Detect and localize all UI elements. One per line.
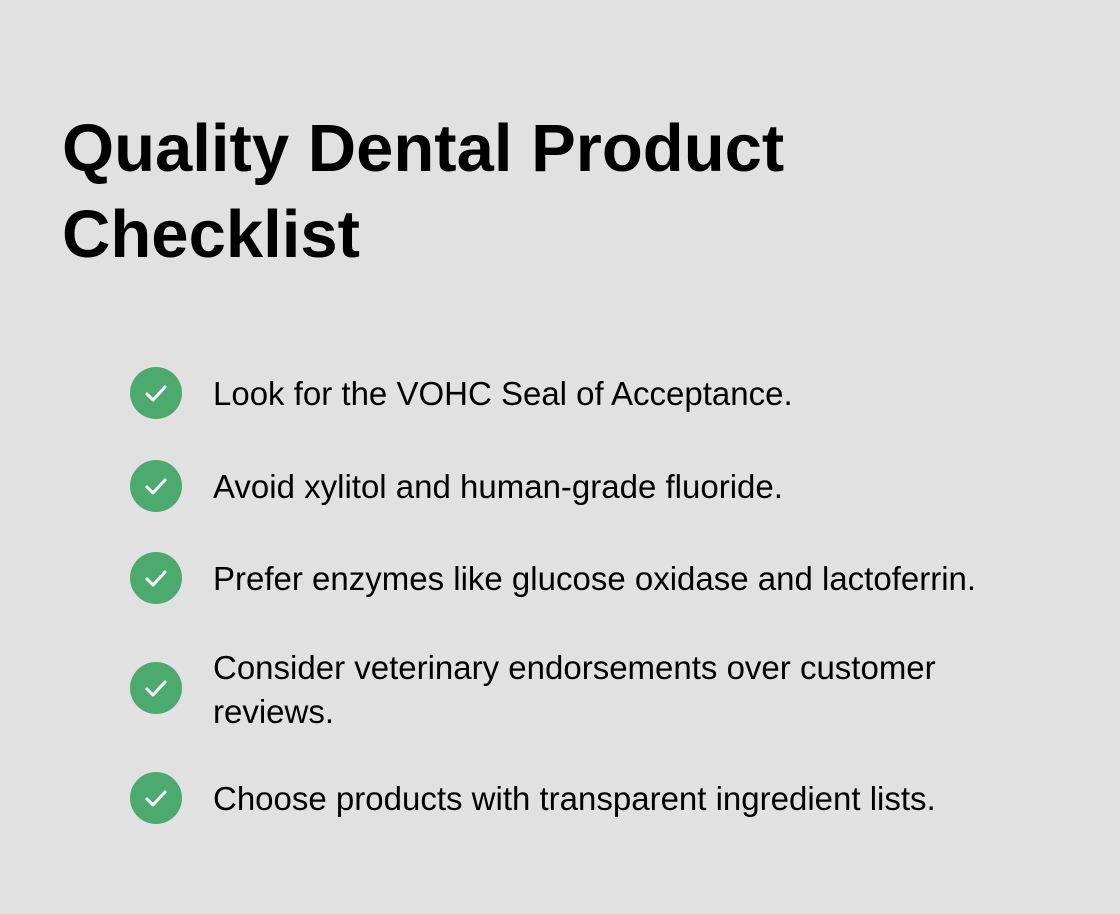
text: Look for the VOHC Seal of Acceptance. [213,375,793,412]
icon: check [130,460,182,512]
text: Choose products with transparent ingredient lists. [213,780,936,817]
title [62,111,784,272]
text: reviews. [213,693,334,730]
text [213,649,936,730]
icon: check [130,367,182,419]
text: Consider veterinary endorsements over customer [213,649,936,686]
item 4 [130,649,936,730]
icon: check [130,772,182,824]
text: Prefer enzymes like glucose oxidase and lactoferrin. [213,560,976,597]
icon: check [130,552,182,604]
title: Quality Dental Product [62,111,784,186]
title: Checklist [62,197,360,272]
item 3 [130,552,976,604]
item 1 [130,367,793,419]
item 5 [130,772,936,824]
item 2 [130,460,783,512]
text: Avoid xylitol and human-grade fluoride. [213,468,783,505]
icon: check [130,662,182,714]
